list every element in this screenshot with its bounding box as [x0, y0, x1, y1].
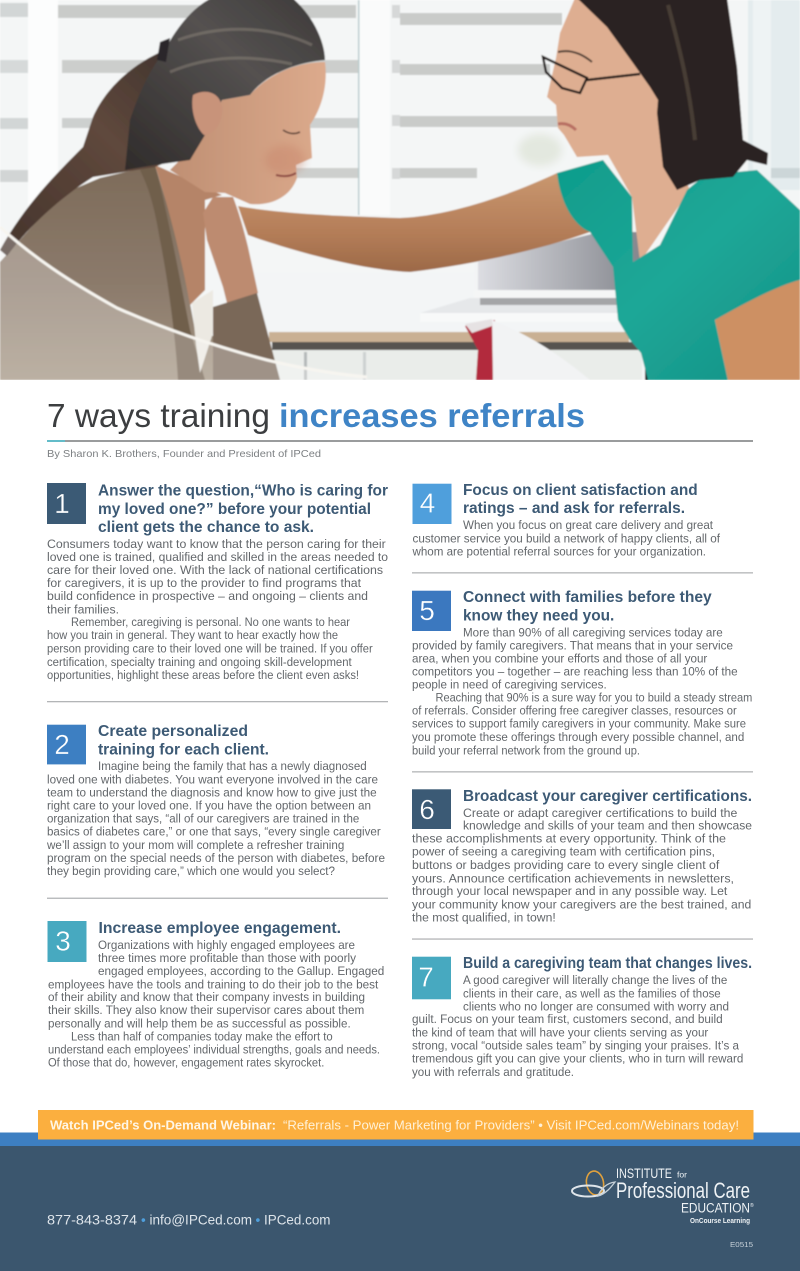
body 5: More than 90% of all caregiving services today are [463, 626, 723, 640]
body 6: the most qualified, in town! [412, 910, 556, 924]
body 2: organization that says, “all of our caregivers are trained in the [47, 812, 359, 826]
cardigan lapel [140, 165, 205, 380]
logo: OnCourse Learning [690, 1218, 750, 1225]
body 6 [412, 806, 752, 924]
body 5: of referrals. Consider offering free caregiver classes, resources or [412, 704, 737, 718]
number box 5 [412, 591, 451, 631]
title [47, 397, 585, 434]
body 5: people in need of caregiving services. [412, 678, 607, 692]
number box 4 [412, 484, 452, 524]
body 6: your community know your caregivers are the best trained, and [412, 897, 751, 911]
title: 7 ways training [47, 397, 270, 434]
body 2: loved one with diabetes. You want everyone involved in the care [47, 772, 378, 786]
body 1 [47, 537, 388, 682]
body 5: build your referral network from the ground up. [412, 743, 640, 757]
section 5 [412, 589, 752, 757]
body 2: we’ll assign to your mom will complete a refresher training [46, 838, 344, 852]
body 6: Create or adapt caregiver certifications to build the [463, 806, 737, 820]
grey hair [125, 0, 325, 170]
body 3: Less than half of companies today make the effort to [71, 1029, 333, 1043]
heading 2 [98, 723, 269, 758]
hair [577, 0, 768, 190]
heading 5: know they need you. [463, 608, 614, 624]
sleeve [213, 293, 280, 380]
heading 1: my loved one?” before your potential [98, 501, 371, 518]
webinar banner: Watch IPCed’s On-Demand Webinar: [50, 1118, 276, 1132]
heading 7: Build a caregiving team that changes lives. [463, 955, 752, 972]
body 6: yours. Announce certification achievements in newsletters, [412, 871, 734, 885]
heading 2: training for each client. [98, 742, 269, 758]
logo: Professional Care [616, 1178, 750, 1203]
title rule [47, 440, 753, 442]
contact line: • [141, 1212, 146, 1228]
contact line: IPCed.com [264, 1212, 330, 1228]
body 7: clients in their care, as well as the families of those [463, 986, 721, 1000]
body 2: Imagine being the family that has a newly diagnosed [98, 759, 367, 773]
body 1: build confidence in prospective – and ongoing – clients and [47, 589, 368, 603]
body 1: for caregivers, it is up to the provider to find programs that [47, 576, 362, 590]
body 7: tremendous gift you can give your clients, who in turn will reward [412, 1052, 743, 1066]
body 3: personally and will help them be as successful as possible. [48, 1016, 351, 1030]
body 4: customer service you build a network of happy clients, all of [412, 531, 721, 545]
number box 7 [412, 957, 451, 999]
logo icon: butterfly [572, 1170, 615, 1196]
body 1: opportunities, highlight these areas before the client even asks! [47, 668, 359, 682]
body 3: their skills. They also know their supervisor cares about them [48, 1003, 364, 1017]
section 2 [46, 723, 385, 878]
body 4: whom are potential referral sources for your organization. [412, 544, 706, 558]
section 6 [412, 788, 752, 924]
body 5: area, when you combine your efforts and those of all your [412, 651, 707, 665]
body 7: A good caregiver will literally change the lives of the [463, 973, 727, 987]
section 3 [48, 920, 384, 1069]
body 2: program on the special needs of the person with diabetes, before [47, 851, 385, 865]
heading 1 [98, 482, 388, 536]
heading 2: Create personalized [98, 723, 248, 740]
body 7 [412, 973, 743, 1079]
section 1 [47, 482, 388, 682]
body 7: strong, vocal “outside sales team” by singing your praises. It’s a [412, 1039, 739, 1053]
paper and red folder [465, 319, 590, 380]
body 5: provided by family caregivers. That means that in your service [412, 638, 733, 652]
body 3: Organizations with highly engaged employees are [98, 938, 355, 952]
heading 1: client gets the chance to ask. [98, 519, 314, 536]
job code: E0515 [730, 1240, 753, 1249]
teal shirt [557, 160, 800, 380]
heading 5 [463, 589, 712, 624]
body 3: three times more profitable than those with poorly [98, 951, 357, 965]
body 6: power of seeing a caregiving team with certification pins, [412, 845, 715, 859]
shirt [192, 290, 213, 373]
section 7 [412, 955, 752, 1079]
body 4 [412, 518, 721, 558]
body 1: certification, specialty training and ongoing skill-development [47, 655, 352, 669]
window blinds background [0, 0, 800, 230]
white swoosh overlay [0, 227, 367, 380]
chest [155, 165, 222, 305]
body 2: basics of diabetes care,” or one that says, “every single caregiver [47, 825, 381, 839]
body 7: guilt. Focus on your team first, customers second, and build [412, 1012, 723, 1026]
body 1: their families. [47, 602, 119, 616]
number box 1: 1 [54, 488, 70, 519]
webinar banner [38, 1110, 754, 1140]
face and neck [170, 62, 326, 204]
body 6: through your local newspaper and in any possible way. Let [412, 884, 728, 898]
hero photo [0, 0, 800, 380]
number box 3: 3 [55, 926, 71, 957]
body 1: person providing care to their loved one will be trained. If you offer [47, 641, 373, 655]
body 2: they begin providing care,” which one would you select? [47, 864, 335, 878]
body 2: right care to your loved one. If you have the option between an [47, 799, 371, 813]
logo: for [677, 1170, 687, 1180]
body 5: Reaching that 90% is a sure way for you to build a steady stream [436, 691, 752, 705]
heading 5: Connect with families before they [463, 589, 712, 606]
webinar banner: “Referrals - Power Marketing for Providers” • Visit IPCed.com/Webinars today! [283, 1118, 739, 1132]
contact line: • [256, 1212, 260, 1228]
hand [203, 197, 258, 307]
body 3: engaged employees, according to the Gallup. Engaged [98, 964, 384, 978]
body 5: you promote these offerings through every possible channel, and [412, 730, 744, 744]
heading 4: Focus on client satisfaction and [463, 482, 698, 499]
heading 3: Increase employee engagement. [98, 920, 341, 937]
number box 6: 6 [419, 794, 435, 825]
contact line [47, 1212, 330, 1228]
body 7: clients who no longer are consumed with worry and [463, 999, 729, 1013]
title: increases referrals [279, 397, 585, 434]
body 6: these accomplishments at every opportunity. Think of the [412, 832, 726, 846]
body 5: services to support family caregivers in your community. Make sure [412, 717, 746, 731]
contact line: 877-843-8374 [47, 1212, 138, 1228]
body 3 [48, 938, 384, 1069]
body 1: loved one is trained, qualified and skilled in the areas needed to [47, 550, 388, 564]
body 5: competitors you – together – are reaching less than 10% of the [412, 665, 738, 679]
right arm [715, 280, 800, 380]
section 4 [412, 482, 721, 558]
table and laptop [250, 232, 655, 380]
heading 4 [463, 482, 698, 517]
footer background [0, 1132, 800, 1271]
logo: INSTITUTE [616, 1166, 672, 1181]
body 1: Consumers today want to know that the person caring for their [47, 537, 386, 551]
contact line: info@IPCed.com [150, 1212, 252, 1228]
number box 6 [412, 789, 451, 829]
body 1: Remember, caregiving is personal. No one wants to hear [71, 615, 350, 629]
logo: EDUCATION [681, 1201, 750, 1216]
body 7: you with referrals and gratitude. [412, 1065, 574, 1079]
face and neck [547, 0, 690, 262]
ponytail [0, 52, 162, 256]
number box 5: 5 [419, 595, 435, 626]
body 2: team to understand the diagnosis and know how to give just the [47, 786, 377, 800]
body 1: care for their loved one. With the lack of national certifications [47, 563, 383, 577]
number box 3 [48, 921, 86, 962]
heading 1: Answer the question,“Who is caring for [98, 482, 388, 500]
body 3: employees have the tools and training to do their job to the best [48, 977, 379, 991]
number box 7: 7 [418, 962, 434, 993]
number box 2: 2 [54, 729, 70, 760]
caregiver arm [238, 173, 590, 272]
woman in teal shirt [543, 0, 800, 380]
heading 6: Broadcast your caregiver certifications. [463, 788, 752, 805]
body 3: understand each employees’ individual strengths, goals and needs. [48, 1042, 380, 1056]
cardigan body [0, 167, 214, 380]
number box 4: 4 [420, 487, 435, 518]
body 6: buttons or badges providing care to every single client of [412, 858, 720, 872]
logo: ® [750, 1202, 754, 1209]
glasses [543, 57, 640, 93]
body 1: how you train in general. They want to hear exactly how the [47, 628, 338, 642]
body 7: the kind of team that will have your clients serving as your [412, 1025, 708, 1039]
body 4: When you focus on great care delivery and great [463, 518, 714, 532]
number box 1 [47, 483, 86, 524]
byline: By Sharon K. Brothers, Founder and President of IPCed [47, 448, 321, 460]
logo [572, 1166, 754, 1225]
woman in cardigan [0, 0, 326, 380]
number box 2 [47, 725, 86, 764]
body 5 [412, 626, 752, 757]
body 2 [46, 759, 385, 878]
body 3: Of those that do, however, engagement rates skyrocket. [48, 1055, 324, 1069]
body 6: knowledge and skills of your team and then showcase [463, 819, 752, 833]
body 3: of their ability and know that their company invests in building [48, 990, 365, 1004]
heading 4: ratings – and ask for referrals. [463, 500, 685, 517]
